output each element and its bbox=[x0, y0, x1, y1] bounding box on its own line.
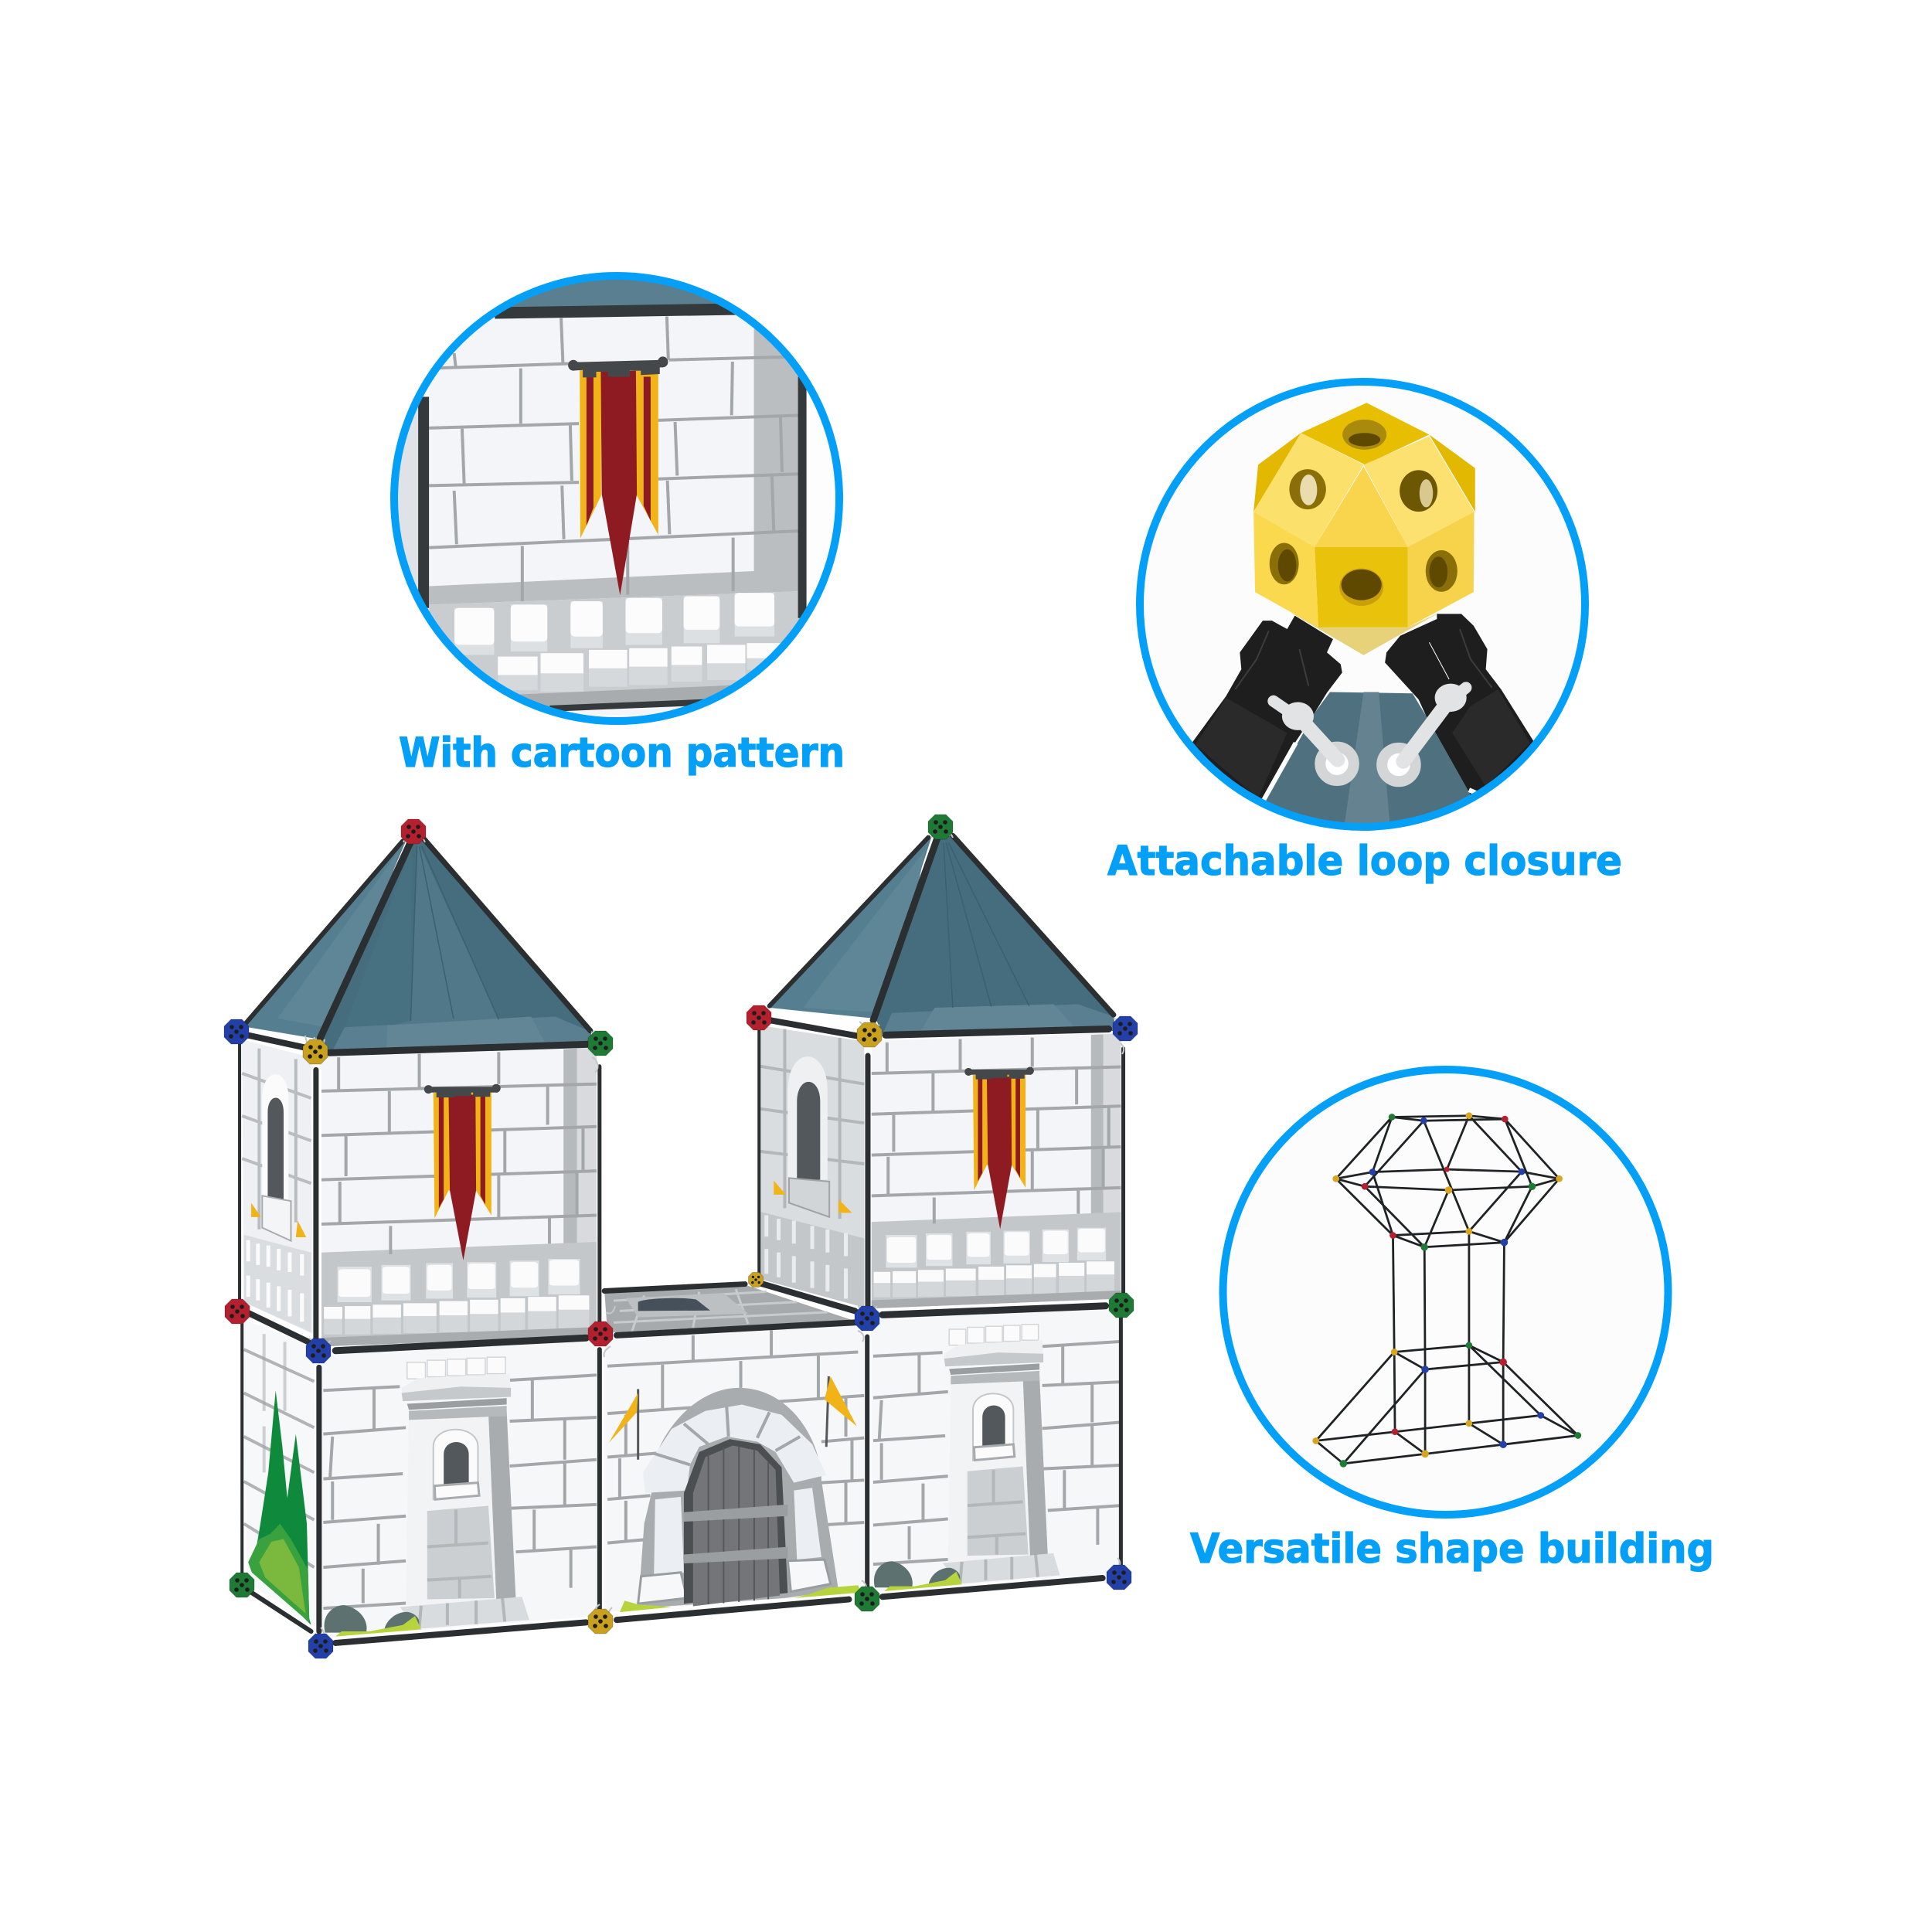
connector balls bbox=[224, 815, 1138, 1658]
label: cartoon pattern: With cartoon pattern bbox=[399, 730, 845, 777]
side poles bbox=[423, 376, 804, 618]
gate pillars bbox=[638, 1488, 831, 1604]
gate grass bbox=[620, 1585, 861, 1612]
callout: cartoon pattern circle bbox=[379, 263, 850, 742]
right black pole end bbox=[1385, 614, 1535, 795]
rooftop patio bbox=[604, 1285, 852, 1333]
lower right front wall bbox=[872, 1308, 1121, 1593]
left tower side wall bbox=[242, 1039, 313, 1334]
right tower side wall bbox=[760, 1026, 864, 1308]
upper storey bbox=[242, 835, 1121, 1346]
gate wall bbox=[604, 1325, 864, 1612]
teal fabric bbox=[1266, 692, 1470, 823]
left clip bbox=[1274, 701, 1354, 781]
right tower roof bbox=[770, 835, 1116, 1034]
left tower roof bbox=[244, 839, 594, 1053]
gate arch bbox=[638, 1388, 838, 1608]
left black pole end bbox=[1189, 616, 1342, 803]
right tower front wall bbox=[872, 1032, 1121, 1308]
wooden gate door bbox=[684, 1439, 787, 1607]
gate flags bbox=[609, 1376, 857, 1460]
label: shape building: Versatile shape building bbox=[1190, 1526, 1714, 1573]
lower right wall backing bbox=[872, 1306, 1121, 1588]
lower left side wall bbox=[244, 1320, 315, 1625]
lower left front wall bbox=[321, 1341, 597, 1638]
top pole bbox=[495, 309, 745, 313]
left tower front wall bbox=[321, 1046, 597, 1346]
pine trees bbox=[248, 1390, 311, 1625]
banner bbox=[568, 356, 668, 595]
callout: shape building circle bbox=[1223, 1070, 1668, 1515]
callout: loop closure circle bbox=[1136, 379, 1600, 840]
loop hooks at the corners bbox=[305, 832, 1124, 1638]
lower storey bbox=[244, 1306, 1121, 1638]
right clip bbox=[1382, 684, 1467, 781]
yellow connector ball bbox=[1253, 403, 1475, 655]
frame poles bbox=[240, 835, 1124, 1643]
wire frame structure bbox=[1312, 1112, 1581, 1468]
label: loop closure: Attachable loop closure bbox=[1107, 838, 1622, 885]
castle fort bbox=[224, 815, 1138, 1658]
